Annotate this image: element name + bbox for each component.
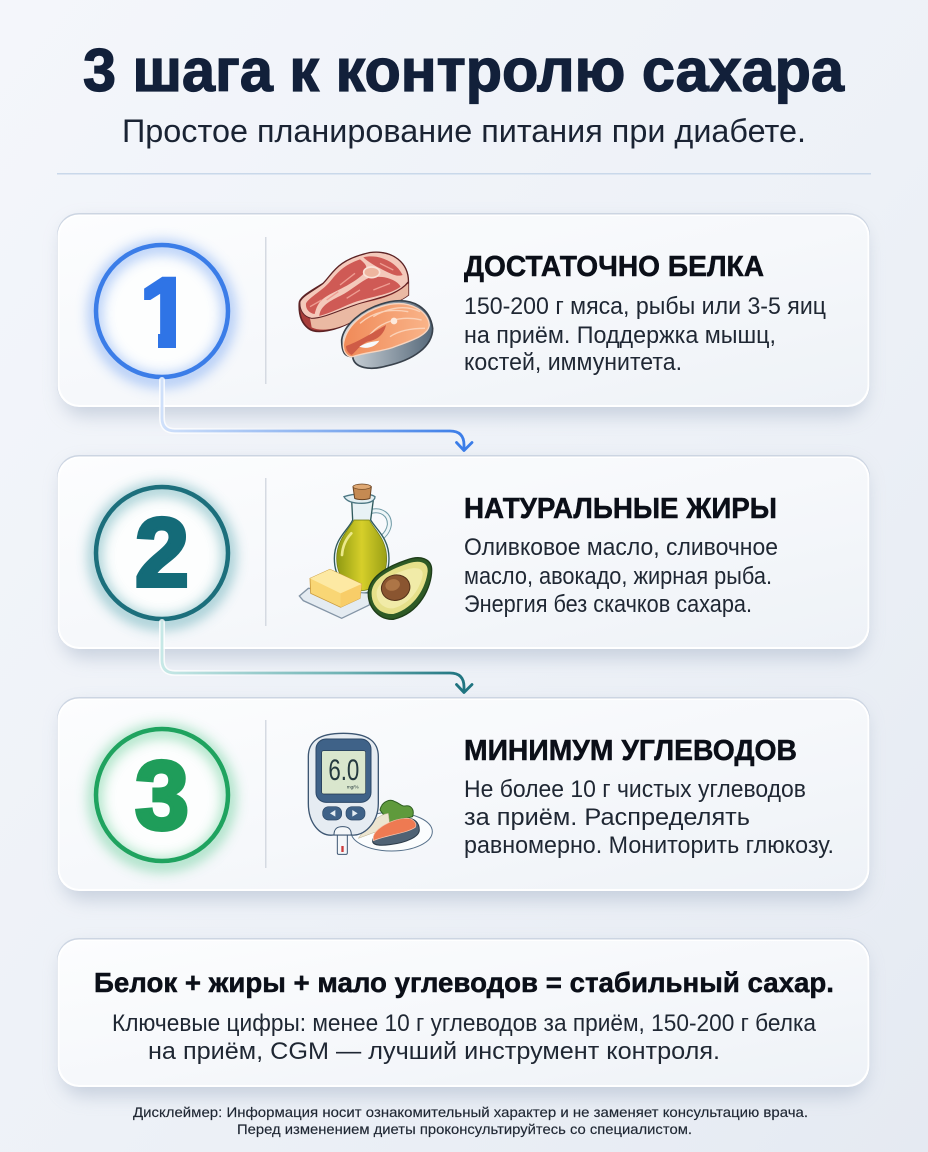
disclaimer: Перед изменением диеты проконсультируйтесь со специалистом. [237,1121,692,1137]
text: step 1 description: на приём. Поддержка мышц, [464,322,776,349]
icon: glucose meter and plate: mg/% [347,785,359,790]
text: step 3 description: равномерно. Мониторить глюкозу. [464,832,834,859]
heading 1: ДОСТАТОЧНО БЕЛКА [464,251,764,283]
text: step 2 description: масло, авокадо, жирная рыба. [464,563,772,590]
number badge 1: 1 [140,258,193,367]
text: step 3 description [464,776,834,859]
panel: step 2 [57,455,870,658]
disclaimer [133,1104,808,1137]
number badge 3 [95,729,229,865]
summary text: Ключевые цифры: менее 10 г углеводов за приём, 150-200 г белка [112,1010,817,1037]
text: step 2 description: Энергия без скачков сахара. [464,591,752,618]
icon: glucose meter and plate: 6.0 [328,754,359,787]
summary heading: Белок + жиры + мало углеводов = стабильный сахар. [94,967,834,998]
disclaimer: Дисклеймер: Информация носит ознакомительный характер и не заменяет консультацию врача. [133,1104,808,1120]
heading 2: НАТУРАЛЬНЫЕ ЖИРЫ [464,493,777,525]
text: step 1 description [464,293,826,376]
number badge 3: 3 [135,741,189,850]
subtitle: Простое планирование питания при диабете. [122,113,806,149]
text: step 1 description: костей, иммунитета. [464,349,682,376]
panel: summary [57,938,870,1096]
summary text: на приём, CGM — лучший инструмент контроля. [148,1038,720,1065]
panel: step 1 [57,213,870,416]
icon: glucose meter and plate [308,733,432,854]
text: step 3 description: Не более 10 г чистых углеводов [464,776,806,803]
title: 3 шага к контролю сахара [83,37,845,104]
heading 3: МИНИМУМ УГЛЕВОДОВ [464,735,797,767]
number badge 1 [95,245,229,381]
text: step 2 description [464,534,778,618]
text: step 2 description: Оливковое масло, сливочное [464,534,778,561]
arrow: step 1 to step 2 [162,380,472,450]
text: step 3 description: за приём. Распределять [464,804,750,831]
number badge 2 [95,487,229,623]
icon: steak and salmon [299,252,433,368]
number badge 2: 2 [135,498,189,607]
panel: step 3 [57,697,870,900]
text: step 1 description: 150-200 г мяса, рыбы или 3-5 яиц [464,293,826,320]
summary text [112,1010,817,1065]
arrow: step 2 to step 3 [162,622,472,692]
icon: olive oil, butter and avocado [299,484,432,619]
